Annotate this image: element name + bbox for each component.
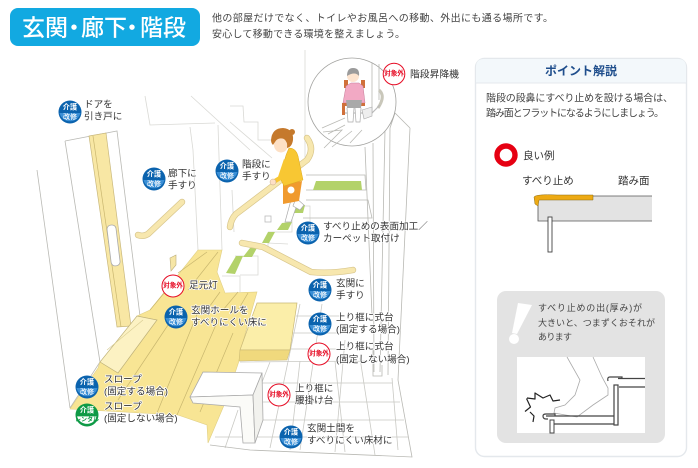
- intro text: [212, 12, 553, 40]
- title banner: ・: [120, 14, 144, 40]
- diagram: good example step: 踏み面: [618, 174, 650, 187]
- callout: door: [58, 100, 122, 124]
- callout: anti-slip stair surface: [296, 220, 428, 244]
- callout: bench: 腰掛け台: [295, 394, 334, 406]
- inset circle: stair lift: [308, 58, 396, 148]
- callout: unfixed ramp: レンタル: [75, 416, 99, 424]
- callout: anti-slip stair surface: 改修: [301, 233, 315, 242]
- callout: bench: 上り框に: [295, 382, 333, 394]
- callout: entrance floor material: [280, 422, 392, 448]
- illustration: entrance hall and stairs: [37, 50, 412, 457]
- callout: stair handrail: 介護: [220, 162, 234, 170]
- upper landing tread: [303, 175, 372, 218]
- callout: entrance floor material: 改修: [284, 437, 298, 446]
- person on stairs: [270, 128, 304, 222]
- callout: corridor handrail: 改修: [147, 179, 161, 188]
- callout: entrance hall floor: [164, 304, 267, 328]
- panel description: [486, 92, 673, 120]
- step platform: [239, 303, 297, 361]
- good example label: [497, 146, 554, 164]
- title banner: [10, 8, 200, 46]
- callout: entrance floor material: 介護: [284, 428, 298, 436]
- callout: anti-slip stair surface: カーペット取付け: [323, 234, 400, 244]
- callout: unfixed ramp: スロープ: [104, 402, 142, 412]
- callout: entrance handrail: [308, 278, 365, 302]
- wooden floor: [70, 250, 257, 443]
- foot light: [170, 255, 176, 271]
- callout: fixed ramp: 改修: [80, 387, 94, 396]
- callout: entrance handrail: 手すり: [336, 290, 365, 302]
- callout: entrance hall floor: すべりにくい床に: [191, 318, 267, 328]
- callout: entrance floor material: 玄関土間を: [307, 422, 355, 434]
- callout: stair lift: 階段昇降機: [410, 68, 459, 80]
- callout: anti-slip stair surface: 介護: [301, 224, 315, 232]
- callout: stair lift: [383, 63, 459, 85]
- callout: bench: [268, 382, 334, 406]
- title banner: ・: [62, 14, 86, 40]
- callout: stair handrail: 手すり: [242, 170, 271, 182]
- panel header: [476, 59, 686, 83]
- callout: stair lift: 対象外: [384, 68, 404, 78]
- callout: corridor handrail: 手すり: [168, 180, 197, 192]
- callout: foot light: 対象外: [163, 280, 183, 290]
- title banner: 階段: [140, 14, 186, 40]
- warning text: [538, 302, 655, 342]
- callout: unfixed ramp: [75, 402, 178, 426]
- title banner: 玄関: [22, 14, 68, 40]
- intro text: 他の部屋だけでなく、トイレやお風呂への移動、外出にも通る場所です。: [212, 12, 553, 24]
- callout: entrance hall floor: 玄関ホールを: [191, 304, 249, 316]
- callout: fixed ramp: (固定する場合): [104, 386, 168, 398]
- warning text: あります: [538, 332, 572, 342]
- callout: unfixed step stand: 上り框に式台: [336, 340, 394, 352]
- handrail: entrance: [242, 243, 353, 273]
- good example label: 良い例: [523, 149, 554, 162]
- ramp: [100, 316, 157, 373]
- callout: door: 引き戸に: [84, 112, 122, 122]
- right panel: point explanation: [476, 58, 686, 456]
- intro text: 安心して移動できる環境を整えましょう。: [212, 28, 405, 40]
- panel header: ポイント解説: [545, 63, 617, 78]
- callout: unfixed step stand: (固定しない場合): [336, 354, 410, 366]
- callout: door: ドアを: [84, 100, 113, 110]
- callout: entrance hall floor: 改修: [169, 317, 183, 326]
- diagram: tripping foot: [517, 357, 645, 433]
- callout: stair handrail: 改修: [220, 171, 234, 180]
- handrail: corridor: [138, 202, 182, 236]
- callout: fixed step stand: [308, 312, 400, 336]
- callout: fixed ramp: [76, 374, 168, 398]
- bench: [190, 372, 263, 443]
- warning text: 大きいと、つまずくおそれが: [538, 317, 655, 328]
- callout: unfixed ramp: (固定しない場合): [104, 412, 178, 424]
- callout: entrance handrail: 改修: [313, 290, 327, 299]
- callout: unfixed step stand: [308, 340, 410, 366]
- callout: entrance floor material: すべりにくい床材に: [307, 434, 392, 446]
- warning box: [497, 291, 665, 443]
- title banner: 廊下: [81, 14, 127, 40]
- callout: stair handrail: 階段に: [242, 158, 271, 170]
- callout: door: 介護: [63, 102, 77, 112]
- right side wall lines: [365, 113, 410, 380]
- diagram: good example step: [522, 174, 652, 252]
- callout: entrance handrail: 介護: [313, 280, 327, 290]
- callout: stair handrail: [216, 158, 271, 182]
- upper walls and stairs: [145, 50, 305, 250]
- tiled entrance floor: [210, 304, 412, 457]
- door: [37, 131, 140, 408]
- panel description: 踏み面とフラットになるようにしましょう。: [486, 106, 664, 120]
- callout: unfixed ramp: 介護: [80, 406, 94, 414]
- diagram: good example step: すべり止め: [522, 175, 574, 187]
- callout: entrance hall floor: 介護: [169, 308, 183, 316]
- warning text: すべり止めの出(厚み)が: [538, 302, 642, 313]
- callout: fixed step stand: 介護: [313, 314, 327, 324]
- callout: fixed step stand: (固定する場合): [336, 324, 400, 336]
- callout: anti-slip stair surface: すべり止めの表面加工／: [323, 220, 428, 232]
- callout: corridor handrail: 廊下に: [168, 168, 197, 180]
- callout: bench: 対象外: [269, 390, 289, 398]
- callout: fixed step stand: 上り框に式台: [336, 312, 394, 324]
- handrail: stair: [230, 138, 311, 227]
- callout: corridor handrail: [142, 168, 197, 192]
- callout: door: 改修: [63, 112, 77, 121]
- callout: corridor handrail: 介護: [147, 170, 161, 178]
- icon: exclamation mark: [509, 303, 532, 344]
- callout: fixed ramp: スロープ: [104, 374, 142, 386]
- callout: foot light: [162, 275, 218, 297]
- panel description: 階段の段鼻にすべり止めを設ける場合は、: [486, 92, 673, 104]
- lower stairs: [222, 205, 310, 292]
- callout: fixed step stand: 改修: [313, 324, 327, 333]
- callout: foot light: 足元灯: [189, 280, 218, 292]
- callout: entrance handrail: 玄関に: [336, 278, 365, 290]
- callout: unfixed step stand: 対象外: [309, 348, 329, 358]
- callout: fixed ramp: 介護: [80, 378, 94, 386]
